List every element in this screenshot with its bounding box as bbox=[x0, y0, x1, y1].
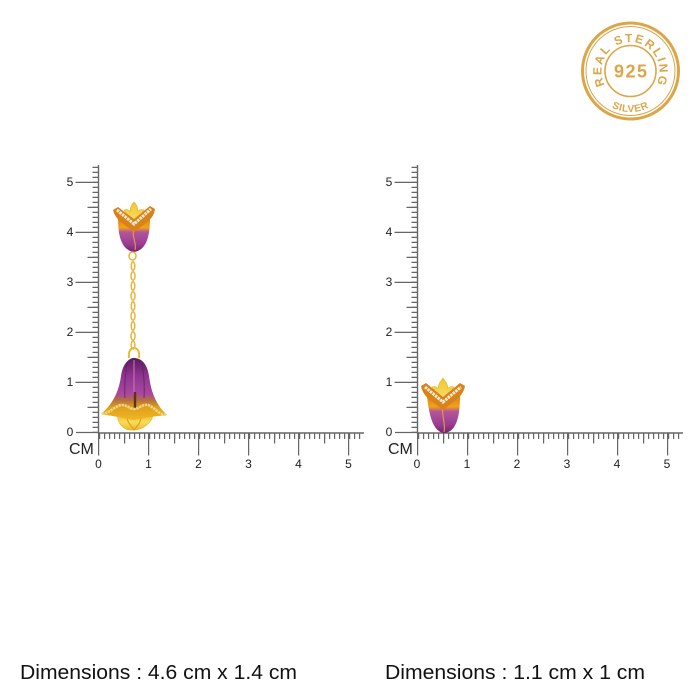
left chart y axis labels: 3 bbox=[67, 275, 74, 289]
left chart y axis labels: 4 bbox=[67, 225, 74, 239]
left chart y axis labels: 2 bbox=[67, 325, 74, 339]
right chart y axis labels: 2 bbox=[386, 325, 393, 339]
right chart x axis labels bbox=[414, 457, 671, 471]
left chart axes and ticks bbox=[76, 165, 364, 444]
left chart unit label: CM bbox=[69, 441, 94, 458]
right chart x axis labels: 3 bbox=[564, 457, 571, 471]
badge: real sterling silver 925: 925 bbox=[614, 62, 647, 82]
earring: stud bud bbox=[421, 378, 465, 433]
caption: left dimensions: Dimensions : 4.6 cm x 1.4 cm bbox=[20, 662, 297, 684]
earring: chain bbox=[129, 252, 139, 358]
caption: right dimensions: Dimensions : 1.1 cm x 1 cm bbox=[385, 662, 645, 684]
right chart x axis labels: 1 bbox=[464, 457, 471, 471]
right chart unit label: CM bbox=[388, 441, 413, 458]
earring: top bud bbox=[113, 202, 155, 252]
left chart x axis labels: 3 bbox=[245, 457, 252, 471]
left chart y axis labels bbox=[67, 175, 74, 439]
right chart x axis labels: 4 bbox=[614, 457, 621, 471]
left chart x axis labels: 4 bbox=[295, 457, 302, 471]
right chart axes and ticks bbox=[395, 165, 683, 444]
right chart y axis labels bbox=[386, 175, 393, 439]
left chart x axis labels: 2 bbox=[195, 457, 202, 471]
right chart y axis labels: 1 bbox=[386, 375, 393, 389]
left chart x axis labels: 0 bbox=[95, 457, 102, 471]
left chart x axis labels: 5 bbox=[345, 457, 352, 471]
left ruler chart bbox=[67, 165, 364, 471]
left chart y axis labels: 5 bbox=[67, 175, 74, 189]
right chart y axis labels: 0 bbox=[386, 425, 393, 439]
left chart y axis labels: 1 bbox=[67, 375, 74, 389]
right ruler chart bbox=[386, 165, 683, 471]
left chart x axis labels: 1 bbox=[145, 457, 152, 471]
right chart y axis labels: 4 bbox=[386, 225, 393, 239]
right chart x axis labels: 5 bbox=[664, 457, 671, 471]
badge: real sterling silver 925: REAL STERLING bbox=[593, 34, 668, 88]
right chart y axis labels: 3 bbox=[386, 275, 393, 289]
badge: real sterling silver 925: SILVER bbox=[612, 102, 648, 112]
right chart x axis labels: 2 bbox=[514, 457, 521, 471]
earring: bell drop bbox=[101, 358, 167, 430]
right chart x axis labels: 0 bbox=[414, 457, 421, 471]
right chart y axis labels: 5 bbox=[386, 175, 393, 189]
left chart x axis labels bbox=[95, 457, 352, 471]
badge: real sterling silver 925 bbox=[581, 22, 680, 120]
left chart y axis labels: 0 bbox=[67, 425, 74, 439]
